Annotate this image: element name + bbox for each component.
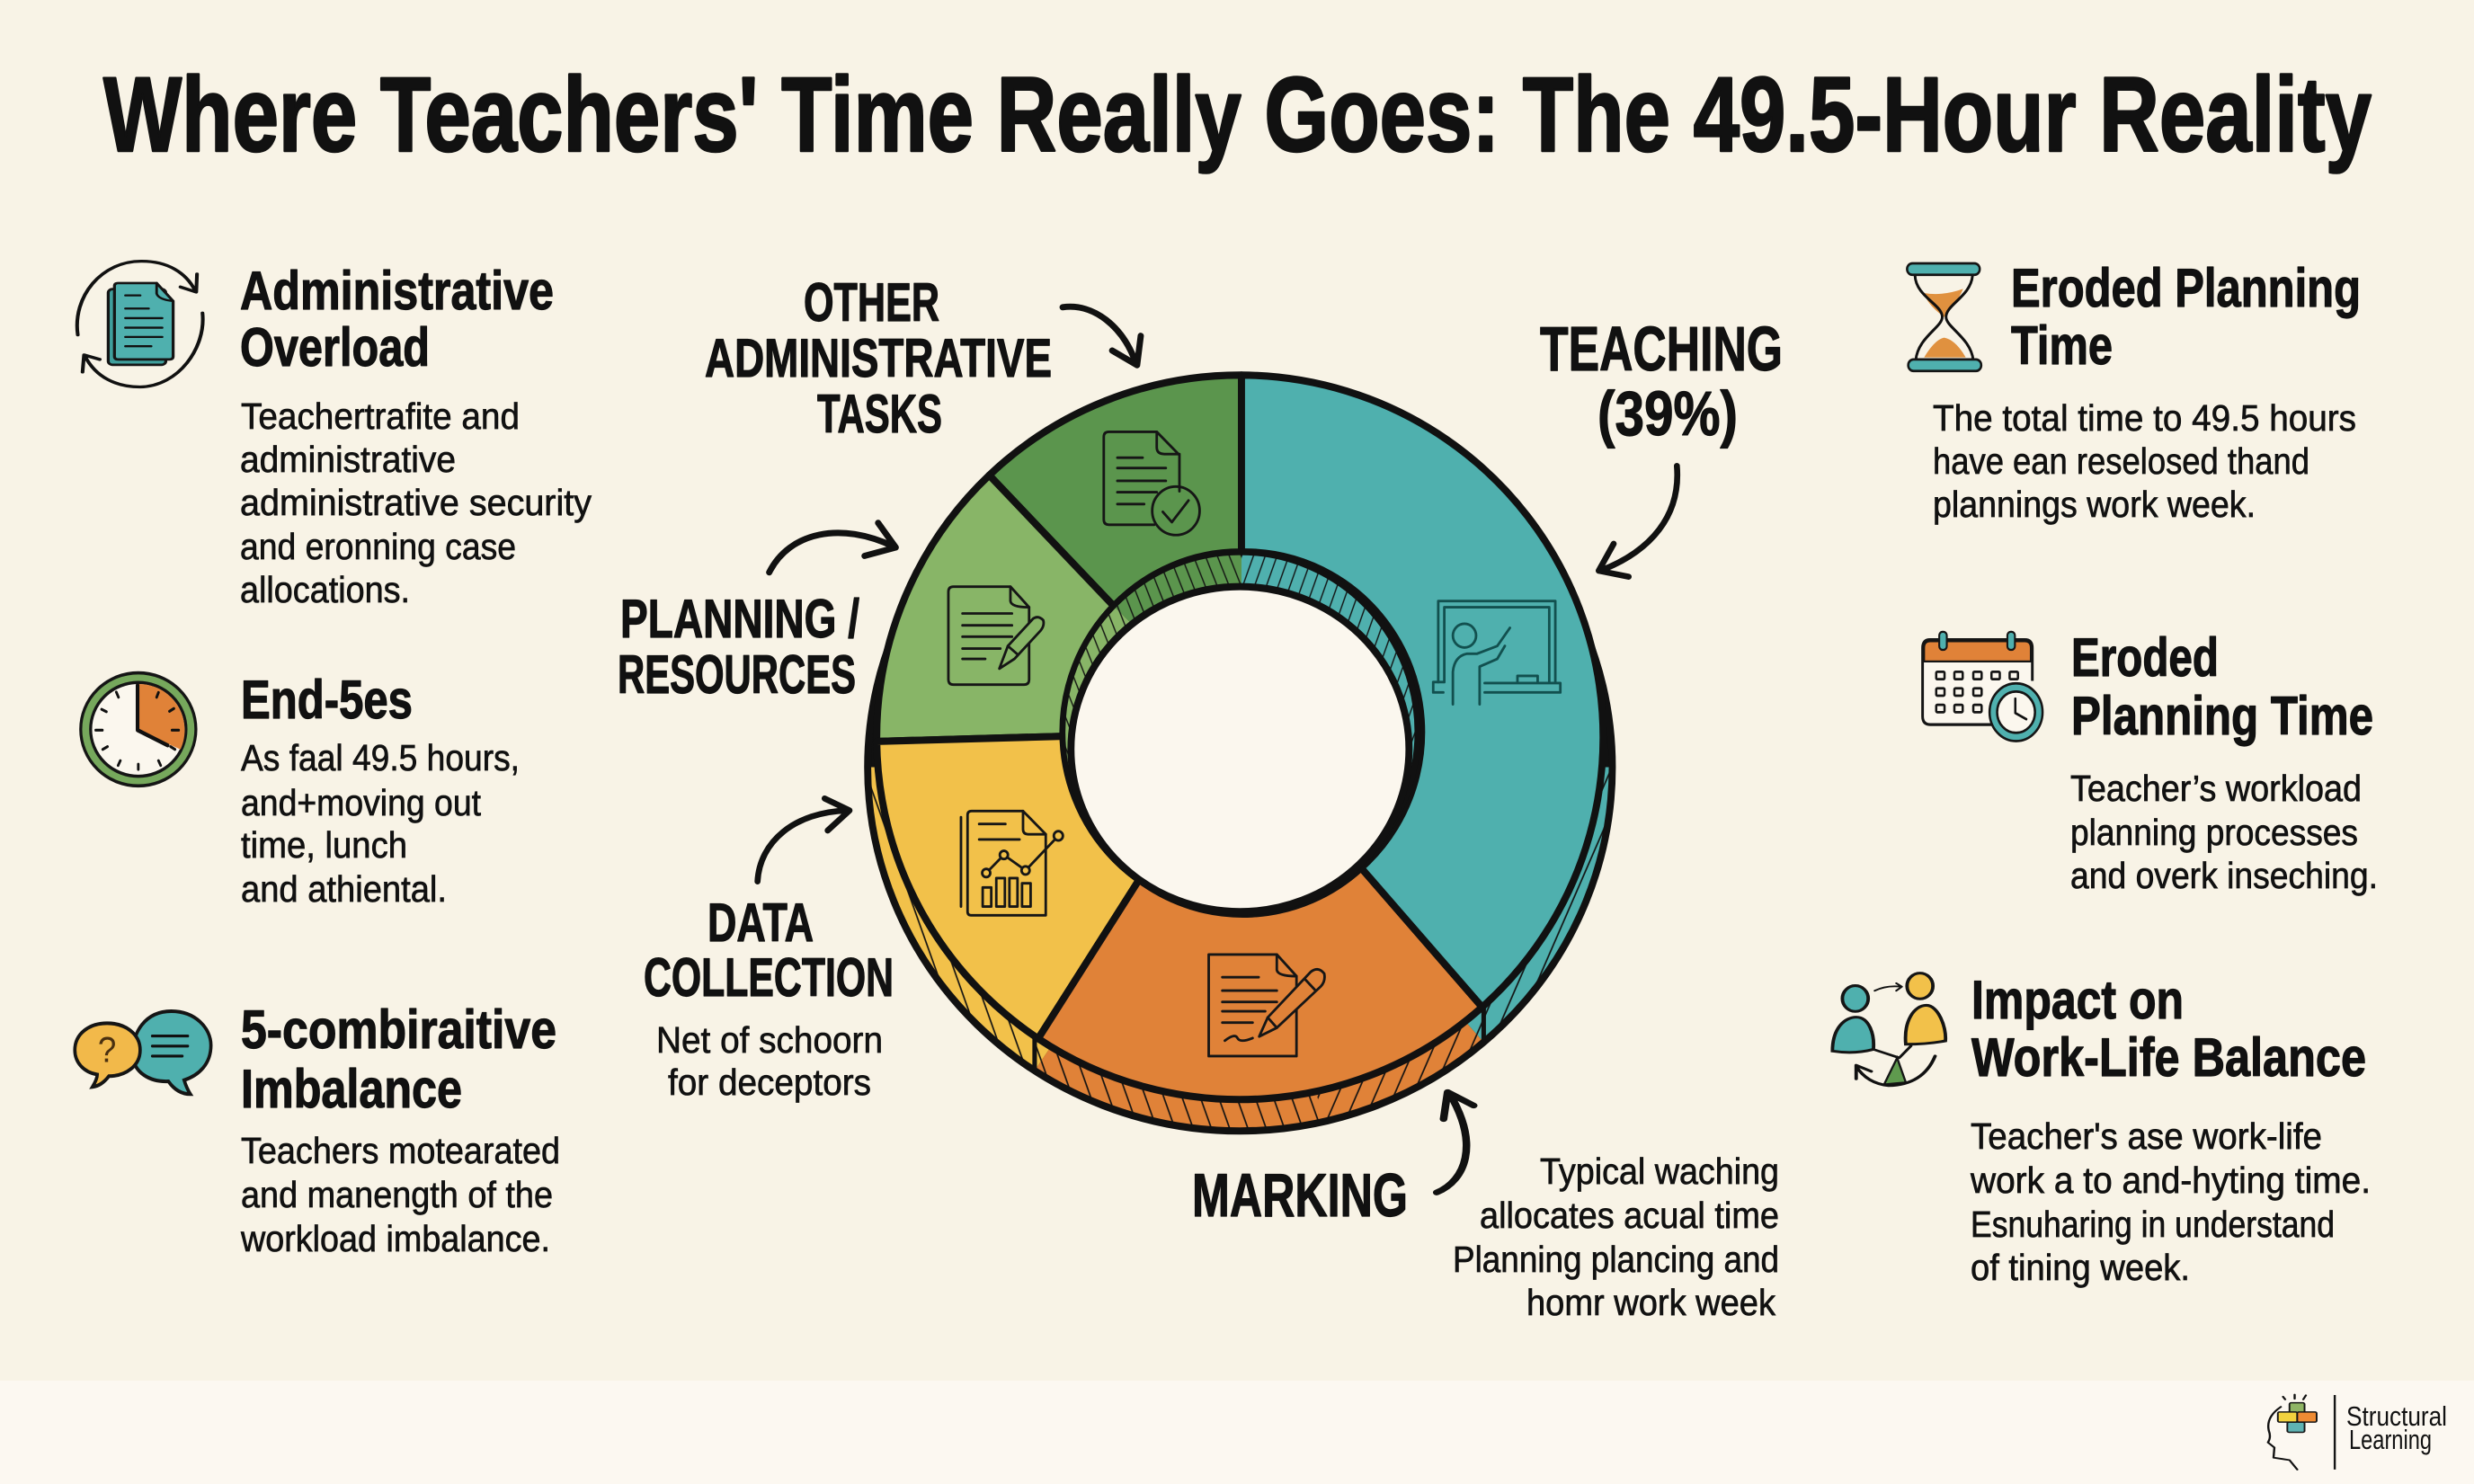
segment: teaching: [1241, 375, 1603, 1007]
heading: [2011, 258, 2361, 376]
body text: As faal 49.5 hours,: [241, 737, 520, 778]
body text: of tining week.: [1971, 1247, 2190, 1288]
panel: eroded planning time 2: [1923, 627, 2378, 896]
icon: document with check: [1104, 431, 1199, 535]
icon: head with blocks: [2268, 1395, 2335, 1470]
body text: and overk inseching.: [2070, 855, 2378, 896]
icon: speech bubbles: [75, 1011, 211, 1094]
body text: allocations.: [240, 569, 410, 610]
icon: people balance: [1832, 973, 1945, 1086]
icon: data report: [961, 811, 1063, 915]
text: marking note: allocates acual time: [1480, 1195, 1779, 1236]
arrow: marking: [1437, 1092, 1473, 1193]
label: data collection: DATA: [707, 893, 814, 953]
body text: and+moving out: [241, 782, 482, 823]
label: planning / resources: [618, 589, 859, 705]
heading: Impact on: [1971, 970, 2184, 1030]
label: data collection: [644, 893, 894, 1103]
body text: Teacher's ase work-life: [1971, 1115, 2322, 1157]
body text: and athiental.: [241, 868, 447, 910]
label: other administrative tasks: ADMINISTRATIVE: [705, 328, 1052, 388]
panel: impact on work-life balance: [1832, 970, 2371, 1288]
body text: and manength of the: [241, 1174, 553, 1215]
body text: plannings work week.: [1933, 484, 2256, 525]
body text: [241, 737, 520, 910]
body text: Esnuharing in understand: [1971, 1204, 2335, 1245]
panel: administrative overload: [77, 261, 592, 610]
label: data collection: for deceptors: [668, 1062, 871, 1103]
label: teaching: [1540, 314, 1783, 449]
body text: Teachertrafite and: [241, 395, 520, 437]
body text: [240, 395, 592, 610]
heading: End-5es: [241, 670, 413, 730]
heading: Imbalance: [241, 1059, 462, 1119]
label: other administrative tasks: TASKS: [817, 384, 942, 444]
icon: hourglass: [1907, 263, 1981, 371]
logo: Structural Learning: [2268, 1395, 2447, 1470]
logo text: Structural: [2346, 1400, 2447, 1432]
body text: [240, 1130, 560, 1259]
body text: [2070, 768, 2378, 896]
label: teaching: (39%): [1597, 378, 1738, 449]
heading: [240, 261, 554, 378]
body text: administrative security: [240, 482, 592, 523]
panel: eroded planning time 1: [1907, 258, 2361, 525]
icon: clock: [81, 673, 196, 786]
heading: [2071, 627, 2373, 746]
heading: Work-Life Balance: [1971, 1027, 2366, 1088]
donut chart: [868, 375, 1612, 1131]
label: other administrative tasks: [705, 272, 1052, 444]
panel: end-5es: [81, 670, 520, 910]
body text: The total time to 49.5 hours: [1933, 397, 2356, 439]
label: other administrative tasks: OTHER: [804, 272, 939, 333]
text: marking note: homr work week: [1526, 1282, 1775, 1323]
panel: 5-combiraitive imbalance: [75, 1000, 560, 1259]
segment: planning / resources: [877, 475, 1114, 742]
heading: Eroded: [2071, 627, 2219, 688]
icon: document with pencil: [948, 587, 1044, 685]
icon: speech bubbles: ?: [98, 1030, 116, 1071]
logo text: Learning: [2349, 1424, 2432, 1455]
heading: Overload: [240, 317, 430, 378]
body text: administrative: [240, 439, 456, 480]
inner wall: [1063, 552, 1418, 912]
heading: Planning Time: [2071, 686, 2373, 746]
body text: and eronning case: [240, 526, 516, 567]
label: planning / resources: PLANNING /: [620, 589, 859, 649]
icon: marked paper with pencil: [1209, 955, 1324, 1056]
icon: calendar with clock: [1923, 632, 2042, 741]
body text: planning processes: [2070, 812, 2358, 853]
heading: 5-combiraitive: [241, 1000, 556, 1060]
segment: other administrative tasks: [989, 375, 1241, 606]
segment: marking: [1038, 867, 1482, 1099]
heading: Time: [2011, 315, 2113, 376]
icon: documents in cycle: [77, 262, 203, 387]
body text: Teachers motearated: [241, 1130, 560, 1171]
label: teaching: TEACHING: [1540, 314, 1783, 384]
arrow: planning: [770, 523, 895, 573]
heading: Eroded Planning: [2011, 258, 2361, 318]
text: marking note: [1453, 1151, 1779, 1323]
extruded edge: [868, 404, 1612, 1131]
icon: teacher at board: [1433, 601, 1561, 705]
heading: Administrative: [240, 261, 554, 321]
body text: time, lunch: [241, 824, 407, 866]
arrow: data collection: [758, 798, 850, 882]
label: data collection: Net of schoorn: [656, 1019, 883, 1061]
body text: [1933, 397, 2356, 525]
arrow: other tasks: [1063, 307, 1141, 365]
body text: have ean reselosed thand: [1933, 440, 2309, 482]
text: marking note: Planning plancing and: [1453, 1239, 1779, 1280]
label: planning / resources: RESOURCES: [618, 644, 856, 705]
body text: work a to and-hyting time.: [1970, 1160, 2371, 1201]
segment: data collection: [877, 736, 1139, 1038]
label: marking: MARKING: [1192, 1161, 1408, 1230]
text: marking note: Typical waching: [1540, 1151, 1779, 1192]
logo text: [2346, 1400, 2447, 1455]
body text: workload imbalance.: [240, 1218, 550, 1259]
heading: [1971, 970, 2366, 1088]
arrow: teaching: [1598, 466, 1678, 577]
body text: Teacher’s workload: [2070, 768, 2362, 809]
body text: [1970, 1115, 2371, 1288]
centre hole: [1071, 587, 1409, 911]
label: data collection: COLLECTION: [644, 947, 894, 1008]
heading: [241, 1000, 556, 1119]
